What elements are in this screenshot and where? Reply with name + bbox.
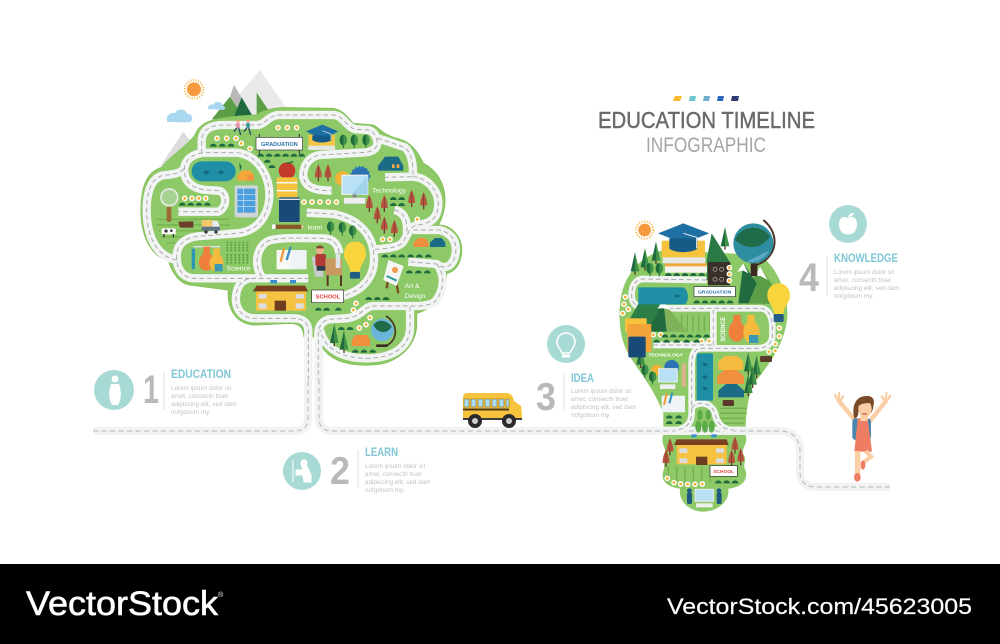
step 1: education: EDUCATION <box>171 369 231 381</box>
icon: flasks <box>729 315 760 343</box>
icon: yellow bulb <box>767 283 790 322</box>
graduation sign: GRADUATION <box>698 290 732 296</box>
bulb shape <box>619 250 787 512</box>
firs and orange house <box>330 324 370 353</box>
icon: computer and people <box>687 488 722 507</box>
step 1: education: adipiscing elit, sed dam <box>171 401 236 408</box>
step 4: knowledge: 4 <box>799 256 820 300</box>
step 2: learn: 2 <box>330 450 350 493</box>
icon: flasks <box>192 247 224 272</box>
step 4: knowledge: nofgdnum my. <box>834 293 874 300</box>
school sign <box>710 466 737 476</box>
icon: gears and computer <box>651 360 686 389</box>
icon: graduation cap <box>306 125 338 150</box>
step 3: idea: Lorem ipsum dolor sit <box>571 388 631 395</box>
icon: bikes board <box>708 262 730 285</box>
footer bar <box>0 564 1000 644</box>
flowers and bushes <box>179 125 432 353</box>
icon: cows <box>723 356 772 406</box>
school sign: SCHOOL <box>713 469 734 475</box>
pond <box>192 161 236 181</box>
technology label: TECHNOLOGY <box>648 353 684 359</box>
step 3: idea: adipiscing elit, sed dam <box>571 404 636 411</box>
step 3: idea: amet, consecth truer <box>571 396 628 403</box>
icon: sun <box>185 80 203 99</box>
icon: magnifier <box>161 189 178 222</box>
step 1: education: amet, consecth truer <box>171 393 228 400</box>
step 4: knowledge <box>799 205 899 300</box>
footer bar: VectorStock.com/45623005 <box>667 594 972 619</box>
icon: sun <box>636 221 653 239</box>
graduation sign <box>694 287 735 297</box>
icon: open book <box>277 247 307 269</box>
icon: computer <box>342 175 368 204</box>
step 2: learn <box>283 447 430 494</box>
crops at the bulb neck <box>695 410 715 433</box>
school building <box>253 280 308 311</box>
brain shape <box>141 108 462 365</box>
colour markers <box>673 96 739 101</box>
trees <box>641 365 656 385</box>
icon: bulb <box>547 325 585 363</box>
icon: graduation cap and books <box>658 223 709 273</box>
graduation sign: GRADUATION <box>261 142 298 148</box>
step 2: learn: LEARN <box>365 447 398 459</box>
school sign: SCHOOL <box>316 295 341 301</box>
brain map <box>141 70 462 380</box>
graduation sign <box>256 134 303 154</box>
science label: SCIENCE <box>720 317 727 342</box>
step 4: knowledge: adipiscing elit, sed dam <box>834 285 899 292</box>
pond <box>638 287 688 304</box>
crops <box>227 242 247 264</box>
step 1: education: Lorem ipsum dolor sit <box>171 385 231 392</box>
art and design label: Art & <box>405 283 420 290</box>
step 3: idea: 3 <box>536 376 556 419</box>
step 2: learn: Lorem ipsum dolor sit <box>365 463 425 470</box>
icon: student <box>283 452 321 490</box>
step 4: knowledge: amet, consecth truer <box>834 277 891 284</box>
school sign <box>312 290 344 303</box>
timeline road <box>93 320 890 487</box>
learn label: learn <box>308 225 323 232</box>
field <box>668 315 747 482</box>
icon: globe <box>371 316 395 347</box>
road network <box>147 115 456 380</box>
title: INFOGRAPHIC <box>646 134 766 157</box>
step 3: idea: IDEA <box>571 373 594 385</box>
mountains <box>630 233 773 332</box>
icon: farm animals and truck <box>162 220 220 237</box>
title: EDUCATION TIMELINE <box>598 107 815 133</box>
trees by the cap <box>340 135 370 148</box>
icon: blue house <box>378 157 403 171</box>
icon: runners <box>234 119 251 135</box>
step 1: education: 1 <box>143 368 159 412</box>
river <box>697 353 713 401</box>
icon: person <box>94 370 134 410</box>
icon: easel <box>383 260 404 293</box>
icons: right houses <box>413 238 445 247</box>
technology label: Technology <box>372 188 407 195</box>
lightbulb map <box>619 220 790 512</box>
learn trees <box>327 221 356 239</box>
flowers and bushes <box>620 265 782 487</box>
step 4: knowledge: Lorem ipsum dolor sit <box>834 269 894 276</box>
footer bar: ® <box>218 591 224 599</box>
step 2: learn: nofgdnum my. <box>365 487 405 494</box>
step 1: education: nofgdnum my. <box>171 409 211 416</box>
step 3: idea <box>536 325 636 419</box>
step 2: learn: amet, consecth truer <box>365 471 422 478</box>
mountains behind brain <box>160 70 287 167</box>
icon: globe <box>733 220 775 276</box>
forest <box>631 227 761 467</box>
school bus <box>463 393 522 428</box>
art and design label: Design <box>405 293 426 300</box>
village houses <box>717 356 744 397</box>
icon: apple <box>829 205 867 243</box>
road network <box>632 279 772 430</box>
girl <box>835 393 890 482</box>
icon: books and apple <box>272 162 304 229</box>
step 3: idea: nofgdnum my. <box>571 412 611 419</box>
science label: Science <box>227 266 251 273</box>
pines <box>315 164 427 237</box>
title <box>598 96 815 157</box>
icon: clouds <box>167 102 225 122</box>
step 4: knowledge: KNOWLEDGE <box>834 253 898 265</box>
step 1: education <box>94 368 236 416</box>
icon: light bulb <box>344 242 366 279</box>
icon: open book <box>662 393 685 412</box>
icon: student at desk <box>312 245 342 286</box>
footer bar: VectorStock <box>26 585 219 623</box>
icon: gears <box>336 167 369 185</box>
icon: orange house <box>237 163 254 181</box>
field stripes <box>157 219 229 243</box>
icon: tablet <box>235 185 258 217</box>
step 2: learn: adipiscing elit, sed dam <box>365 479 430 486</box>
icon: books <box>625 318 651 357</box>
school building <box>674 434 729 465</box>
